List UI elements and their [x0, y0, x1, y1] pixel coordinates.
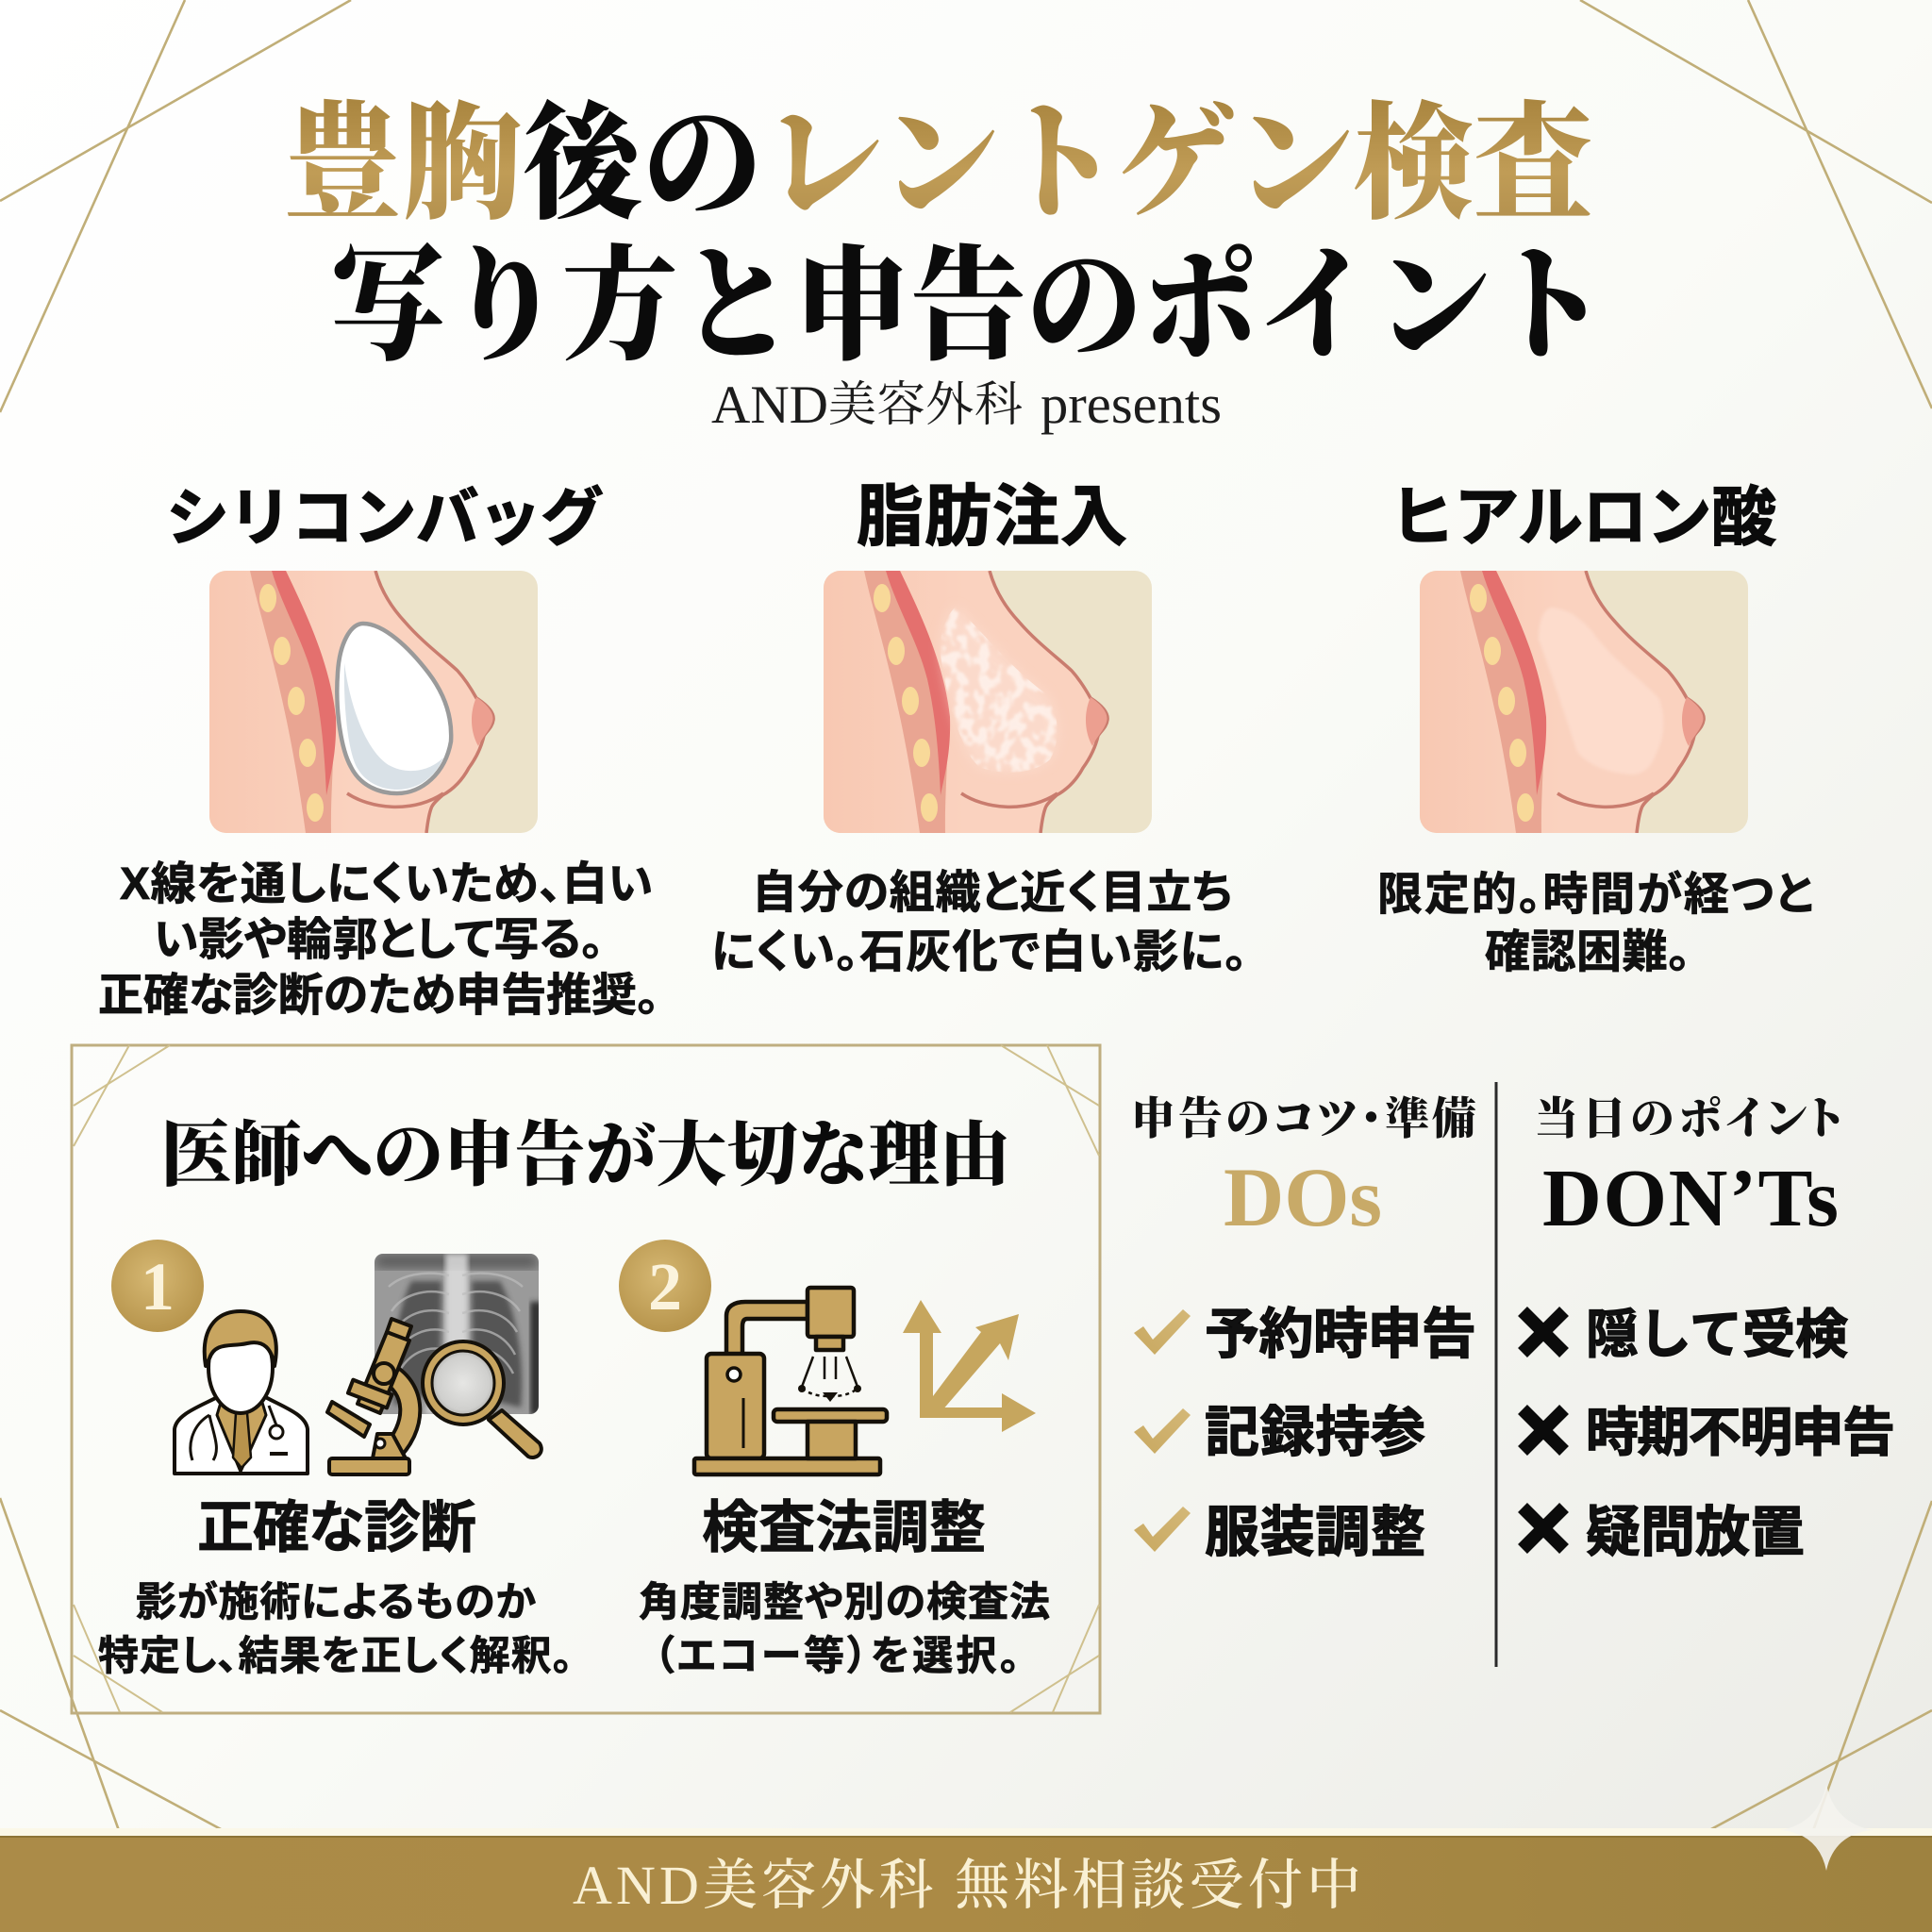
icon: adjustment arrows: [903, 1300, 1036, 1432]
item text: accurate diagnosis: 影が施術によるものか: [136, 1580, 536, 1625]
DOs heading: DOs: [1224, 1152, 1382, 1244]
icon: chest x-ray: [375, 1254, 541, 1415]
DON'Ts heading: DON’Ts: [1542, 1152, 1839, 1243]
do item 1: 予約時申告: [1205, 1304, 1476, 1365]
heading: fat injection: 脂肪注入: [857, 480, 1127, 555]
description: hyaluronic acid: 限定的。時間が経つと: [1377, 870, 1813, 920]
icon: doctor: [175, 1311, 308, 1474]
description: fat injection: [711, 868, 1247, 977]
panel: DOs: [1131, 1095, 1476, 1563]
description: hyaluronic acid: [1377, 870, 1813, 977]
sparkle star: [1781, 1784, 1873, 1871]
column divider: [1494, 1082, 1498, 1667]
subtitle: 美容外科: [828, 379, 1023, 432]
don't item 2: 時期不明申告: [1586, 1403, 1895, 1462]
panel heading: 医師への申告が大切な理由: [160, 1117, 1010, 1195]
subtitle: AND: [711, 375, 828, 435]
DON'Ts eyebrow: 当日のポイント: [1534, 1095, 1842, 1144]
item text: change exam method: （エコー等）を選択。: [654, 1634, 1020, 1679]
item title: accurate diagnosis: 正確な診断: [197, 1496, 476, 1559]
subtitle: [711, 374, 1222, 435]
item text: accurate diagnosis: 特定し、結果を正しく解釈。: [98, 1634, 573, 1679]
illustration: hyaluronic acid: [1420, 571, 1748, 833]
icon: magnifying glass: [423, 1341, 541, 1457]
DOs eyebrow: 申告のコツ・準備: [1131, 1095, 1476, 1144]
icon: microscope: [327, 1319, 411, 1474]
check list: [1134, 1304, 1476, 1563]
panel: DON'Ts: [1523, 1095, 1895, 1563]
title line 2: 写り方と申告のポイント: [330, 238, 1607, 376]
description: silicone bag: [98, 859, 659, 1021]
illustration: silicone implant: [209, 571, 538, 833]
description: hyaluronic acid: 確認困難。: [1485, 927, 1690, 977]
title: [283, 95, 1607, 376]
badge 2: 2: [648, 1249, 682, 1324]
description: silicone bag: い影や輪郭として写る。: [154, 915, 604, 965]
footer band: [0, 1828, 1932, 1932]
description: fat injection: にくい。石灰化で白い影に。: [711, 927, 1247, 977]
subtitle: presents: [1041, 374, 1222, 435]
badge 2: [619, 1240, 711, 1332]
item title: change exam method: 検査法調整: [702, 1496, 986, 1559]
description: fat injection: 自分の組織と近く目立ち: [752, 868, 1232, 918]
panel: hyaluronic acid: [1377, 481, 1813, 977]
illustration: fat injection: [824, 571, 1152, 833]
description: silicone bag: 正確な診断のため申告推奨。: [98, 971, 659, 1021]
do item 2: 記録持参: [1205, 1402, 1425, 1463]
heading: silicone bag: シリコンバッグ: [166, 483, 604, 554]
panel: why reporting to the doctor matters: [72, 1045, 1100, 1713]
cross list: [1523, 1305, 1895, 1563]
don't item 3: 疑問放置: [1586, 1502, 1805, 1563]
heading: hyaluronic acid: ヒアルロン酸: [1390, 481, 1776, 554]
icon: imaging machine: [694, 1288, 887, 1474]
description: silicone bag: X線を通しにくいため、白い: [120, 859, 653, 909]
don't item 1: 隠して受検: [1586, 1305, 1848, 1364]
title line 1: 豊胸後のレントゲン検査: [283, 95, 1593, 236]
badge 1: 1: [141, 1249, 175, 1324]
footer text: AND美容外科 無料相談受付中: [573, 1855, 1361, 1916]
item text: change exam method: 角度調整や別の検査法: [639, 1580, 1050, 1625]
badge 1: [111, 1240, 204, 1332]
panel: silicone bag: [98, 483, 659, 1021]
do item 3: 服装調整: [1205, 1502, 1425, 1563]
panel: fat injection: [711, 480, 1247, 977]
item text: change exam method: [639, 1580, 1050, 1679]
item text: accurate diagnosis: [98, 1580, 573, 1679]
